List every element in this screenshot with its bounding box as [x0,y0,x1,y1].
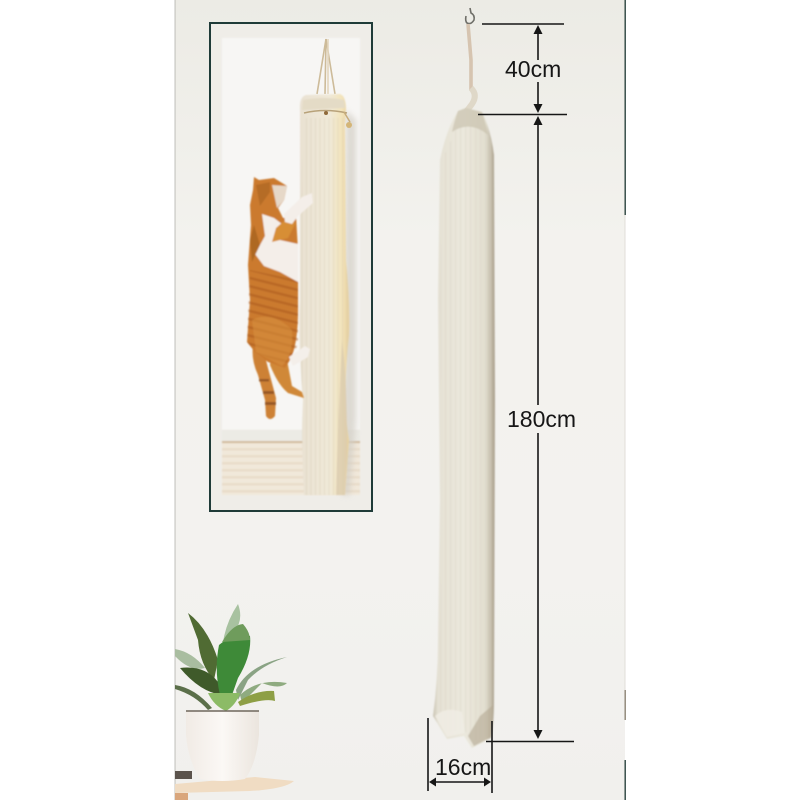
hook [466,8,474,24]
shelf [175,771,294,800]
dimension: 40cm [478,24,567,114]
plant in white pot on shelf [175,604,294,800]
small scratcher body [299,94,349,495]
back leg [270,350,304,398]
photo skirting and floor [222,430,360,495]
dimension: 180cm [486,116,576,742]
leaves [175,604,287,711]
arm [272,214,295,242]
hook and cord [466,8,475,112]
drawstring and toggle [304,110,352,128]
cat [247,177,313,419]
tail [253,345,276,419]
large scratcher bag [433,108,495,748]
raised white paw [284,193,313,224]
dimension: 16cm: 16cm [435,754,491,780]
photo wall [222,38,360,430]
muzzle [272,185,287,208]
lower white paw [289,346,310,366]
scratcher shadow [342,110,356,495]
hanging loop [317,39,335,94]
dimension: 16cm [428,718,492,793]
dimension: 180cm: 180cm [507,406,576,432]
framed photo: cat climbing the scratcher [210,23,372,511]
wall background [174,0,626,800]
body [247,177,298,368]
dimension: 40cm: 40cm [505,56,561,82]
cord [468,24,471,90]
head markings [250,182,270,262]
white chest [255,214,298,282]
pot [186,711,259,781]
bottom folds [435,710,465,737]
frame border [210,23,372,511]
